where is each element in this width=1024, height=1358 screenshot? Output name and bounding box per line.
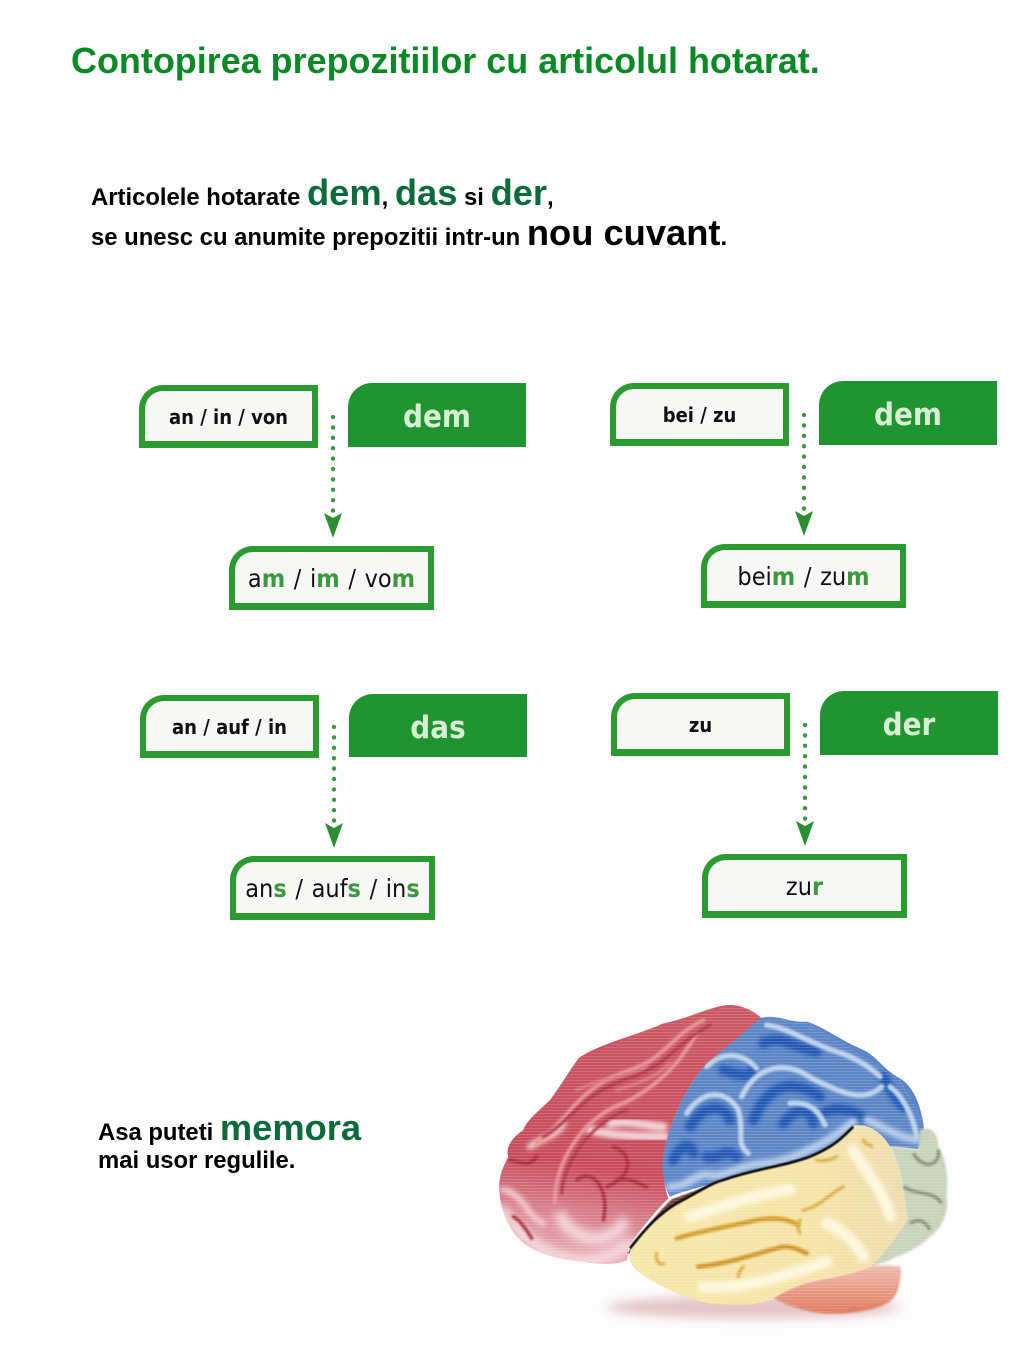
panel: an/in/von + dem	[139, 383, 526, 610]
result box: ans / aufs / ins	[245, 874, 420, 903]
memory note text: Asa puteti memora	[98, 1107, 361, 1148]
article box: dem	[348, 383, 526, 447]
dark fissure between lobes	[630, 1127, 853, 1248]
article box: das	[349, 694, 527, 757]
prepositions box	[140, 695, 319, 758]
intro text	[91, 172, 727, 253]
panel: an/auf/in + das	[140, 694, 527, 920]
intro text: se unesc cu anumite prepozitii intr-un nou cuvant.	[91, 212, 727, 253]
occipital lobe (grey-green)	[870, 1129, 947, 1267]
article box: dem: dem	[874, 397, 942, 433]
prepositions box: an / auf / in	[172, 715, 287, 739]
brain shadow	[607, 1296, 900, 1319]
prepositions box	[139, 385, 318, 448]
article box: dem: dem	[403, 399, 471, 435]
prepositions box: zu	[689, 713, 712, 737]
article box: der	[820, 691, 998, 755]
arrow	[324, 415, 342, 538]
arrow	[796, 723, 814, 846]
result box	[230, 856, 435, 920]
result box	[229, 546, 434, 610]
icon: coloured brain	[499, 1004, 948, 1324]
result box: am / im / vom	[248, 564, 415, 593]
article box: dem	[819, 381, 997, 445]
arrow	[325, 725, 343, 848]
article box: das: das	[410, 710, 466, 746]
result box: beim / zum	[737, 562, 870, 591]
prepositions box	[611, 693, 790, 756]
memory note text	[98, 1107, 362, 1174]
article box: der: der	[883, 707, 935, 743]
intro text: Articolele hotarate dem, das si der,	[91, 172, 554, 213]
cerebellum	[773, 1265, 901, 1314]
title: Contopirea prepozitiilor cu articolul hotarat.	[71, 40, 820, 81]
temporal lobe (yellow)	[623, 1120, 910, 1310]
result box	[701, 544, 906, 608]
prepositions box: an / in / von	[169, 405, 288, 429]
result box	[702, 854, 907, 918]
arrow	[795, 413, 813, 536]
prepositions box	[610, 383, 789, 446]
frontal lobe (red)	[499, 1004, 762, 1264]
result box: zur	[786, 872, 823, 901]
scanlines texture	[499, 1005, 947, 1313]
fissure backing	[627, 1180, 723, 1253]
memory note text: mai usor regulile.	[98, 1147, 295, 1174]
parietal lobe (blue)	[662, 1016, 924, 1196]
prepositions box: bei / zu	[663, 403, 736, 427]
panel: zu + der	[611, 691, 998, 918]
panel: bei/zu + dem	[610, 381, 997, 608]
